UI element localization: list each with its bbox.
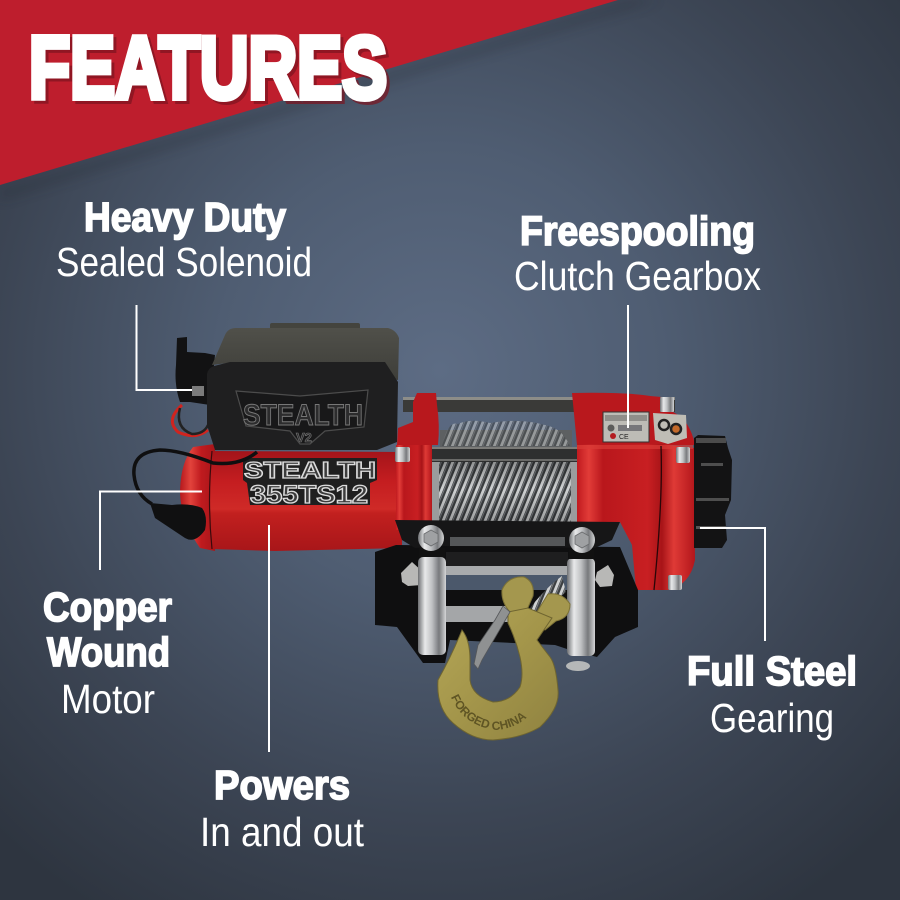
STEALTH embossed logo [236,390,368,445]
side bolts [401,562,614,587]
right roller [566,527,595,671]
mounting foot [375,545,638,663]
label: copper wound: Motor [61,676,155,722]
left motor end cap [180,444,215,551]
label: freespooling: Clutch Gearbox [514,253,761,299]
warning label [603,412,649,442]
motor badge: STEALTH [244,457,376,483]
label: heavy duty [56,194,312,285]
motor badge: 355TS12 [250,481,368,509]
label: freespooling [514,208,761,299]
STEALTH embossed logo: STEALTH [243,399,363,432]
hook: FORGED CHINA [451,694,526,730]
label: heavy duty: Sealed Solenoid [56,239,312,285]
red banner [0,0,660,200]
motor body [210,451,402,551]
label: full steel [687,648,857,741]
solenoid box [207,323,399,450]
label: powers [200,762,365,855]
label: powers: In and out [200,809,365,855]
rope drum [432,421,577,522]
label: powers: Powers [214,762,350,808]
hook [437,608,559,740]
label: full steel: Full Steel [687,648,857,694]
fairlead slot [446,537,568,566]
shackle [502,576,570,630]
front frame rod [432,447,578,462]
callout line: gearbox [627,305,629,428]
warning label: CE [619,434,629,441]
label: heavy duty: Heavy Duty [84,194,286,240]
left roller [418,525,446,655]
label: copper wound [43,584,172,722]
title: FEATURES [29,18,387,117]
label: copper wound: Copper [43,584,172,630]
left frame flange [395,393,439,530]
callout line: motor [100,492,202,570]
callout line: powers [268,525,270,752]
solenoid boot [176,337,215,405]
winch [132,323,732,740]
motor badge [243,457,377,509]
red and black wires [134,405,257,504]
STEALTH embossed logo: V2 [296,430,312,445]
callout line: steel gearing [700,528,765,641]
fairlead plate [395,520,620,548]
gear label [653,413,687,444]
wire plug [150,503,206,540]
rear roller opening [446,566,568,622]
rear frame rod [403,397,675,412]
title: FEATURES [32,21,390,120]
label: copper wound: Wound [47,629,170,675]
callout line: solenoid [136,305,192,390]
label: full steel: Gearing [710,695,834,741]
label: freespooling: Freespooling [520,208,755,254]
drive knob [694,435,732,548]
hook latch [474,606,510,669]
gearbox housing [572,393,695,590]
